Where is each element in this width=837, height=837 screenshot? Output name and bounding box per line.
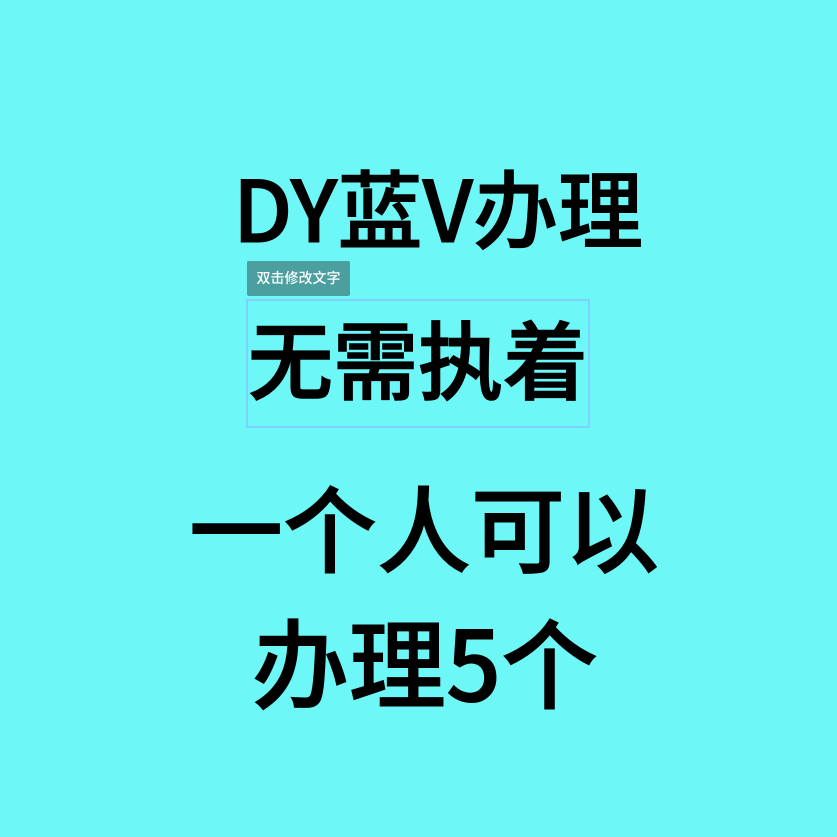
text line: 一个人可以: 一个人可以 xyxy=(189,457,659,593)
text line: 办理5个: 办理5个 xyxy=(252,588,598,729)
heading: 无需执着: 无需执着 xyxy=(248,295,588,418)
edit tooltip button xyxy=(247,261,350,296)
title: DY蓝V办理: DY蓝V办理 xyxy=(233,144,643,267)
selection box xyxy=(246,299,590,428)
edit tooltip button: 双击修改文字 xyxy=(256,268,340,288)
